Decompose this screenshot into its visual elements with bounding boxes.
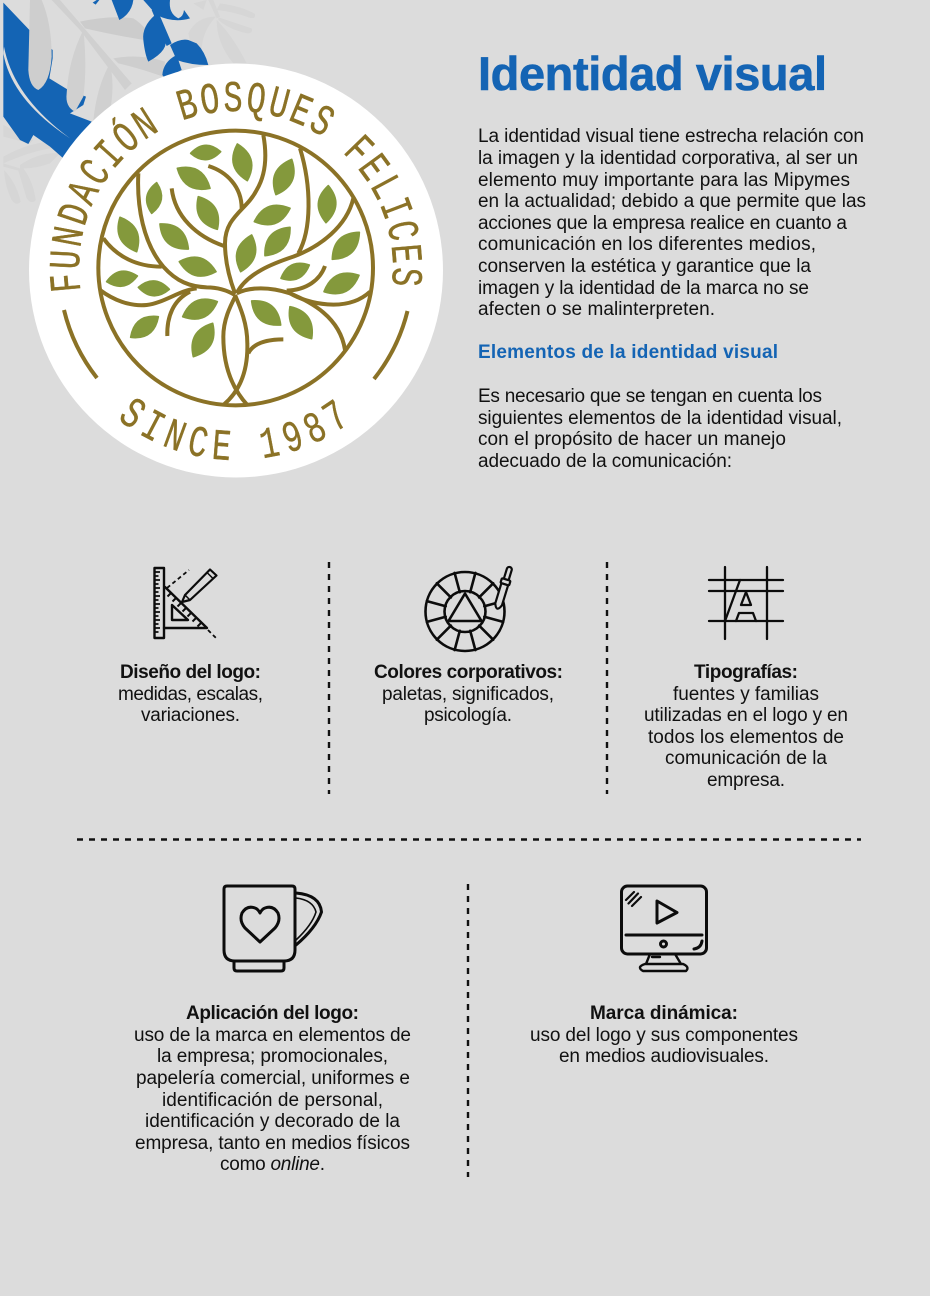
text: diseño del logo: medidas, escalas, <box>118 684 263 705</box>
icon: ruler, set square and pencil <box>154 568 217 639</box>
text: colores corporativos: paletas, significados, <box>382 684 554 705</box>
logo text: Fundación Bosques Felices: I <box>367 191 421 227</box>
second paragraph: con el propósito de hacer un manejo <box>478 429 786 450</box>
text: tipografías: utilizadas en el logo y en <box>644 705 848 726</box>
logo side arcs <box>64 310 408 379</box>
intro paragraph: La identidad visual tiene estrecha relación con <box>478 126 864 147</box>
logo tree emblem <box>98 131 373 405</box>
logo text: Fundación Bosques Felices: C <box>70 151 123 195</box>
logo text: Since 1987: C <box>183 418 212 471</box>
text: marca dinámica <box>530 1003 798 1067</box>
logo text: Since 1987: 9 <box>276 412 310 466</box>
tree leaves <box>107 144 359 357</box>
text: aplicación del logo: la empresa; promocionales, <box>157 1046 388 1067</box>
intro paragraph: comunicación en los diferentes medios, <box>478 234 816 255</box>
text: tipografías: fuentes y familias <box>673 684 819 705</box>
second paragraph <box>478 386 842 472</box>
text: aplicación del logo: Aplicación del logo: <box>186 1003 359 1024</box>
logo text: Fundación Bosques Felices: Q <box>244 75 268 127</box>
logo text: Fundación Bosques Felices: U <box>42 249 93 270</box>
text: marca dinámica: uso del logo y sus componentes <box>530 1025 798 1046</box>
icon: mug with heart <box>224 886 322 971</box>
logo text: Fundación Bosques Felices: S <box>300 96 342 149</box>
text: diseño del logo: variaciones. <box>141 705 240 726</box>
logo text: Fundación Bosques Felices: I <box>86 131 136 179</box>
logo text: Fundación Bosques Felices: D <box>49 198 103 232</box>
logo text: Fundación Bosques Felices: U <box>263 78 294 132</box>
text: aplicación del logo: uso de la marca en elementos de <box>134 1025 411 1046</box>
text: aplicación del logo: identificación de personal, <box>162 1090 383 1111</box>
logo text: Since 1987: E <box>210 422 233 474</box>
text: colores corporativos: Colores corporativos: <box>374 662 563 683</box>
decorative foliage: blue and grey leaves <box>3 0 255 204</box>
tree ring and branches <box>98 131 373 405</box>
logo text: Since 1987 <box>109 389 359 474</box>
logo text: Since 1987: 1 <box>256 419 284 472</box>
logo text: Since 1987: 8 <box>296 403 335 457</box>
text: tipografías: comunicación de la <box>665 748 827 769</box>
intro paragraph: acciones que la empresa realice en cuanto a <box>478 213 847 234</box>
intro paragraph: la imagen y la identidad corporativa, al ser un <box>478 148 858 169</box>
text: aplicación del logo: identificación y decorado de la <box>145 1111 400 1132</box>
text: tipografías: Tipografías: <box>694 662 798 683</box>
text: aplicación del logo <box>134 1003 411 1175</box>
icon: colour wheel and dropper <box>426 566 514 651</box>
logo text: Since 1987: I <box>132 401 172 455</box>
text: marca dinámica: en medios audiovisuales. <box>559 1046 769 1067</box>
logo text: Fundación Bosques Felices <box>42 74 430 294</box>
logo text: Fundación Bosques Felices: N <box>124 99 167 152</box>
text: colores corporativos <box>374 662 563 726</box>
white logo disc <box>29 64 443 478</box>
logo text: Since 1987: S <box>109 389 154 441</box>
text: aplicación del logo: papelería comercial, uniformes e <box>136 1068 410 1089</box>
text: aplicación del logo: empresa, tanto en medios físicos <box>135 1133 410 1154</box>
second paragraph: adecuado de la comunicación: <box>478 451 732 472</box>
text: diseño del logo <box>118 662 263 726</box>
text: tipografías <box>644 662 848 791</box>
intro paragraph <box>478 126 866 320</box>
icon: typography grid <box>709 567 783 639</box>
logo text: Fundación Bosques Felices: E <box>378 242 430 265</box>
logo text: Fundación Bosques Felices: C <box>374 216 427 246</box>
logo text: Fundación Bosques Felices: Ó <box>103 113 151 165</box>
logo text: Fundación Bosques Felices: E <box>282 85 319 139</box>
intro paragraph: elemento muy importante para las Mipymes <box>478 170 850 191</box>
logo: Fundación Bosques Felices <box>29 64 443 478</box>
logo text: Fundación Bosques Felices: L <box>358 168 411 208</box>
logo text: Fundación Bosques Felices: F <box>42 271 94 294</box>
intro paragraph: conserven la estética y garantice que la <box>478 256 811 277</box>
icon: monitor with play button <box>622 886 706 971</box>
logo text: Fundación Bosques Felices: F <box>332 127 382 175</box>
logo text: Fundación Bosques Felices: S <box>223 74 243 125</box>
logo text: Fundación Bosques Felices: E <box>346 146 398 191</box>
text: diseño del logo: Diseño del logo: <box>120 662 261 683</box>
intro paragraph: afecten o se malinterpreten. <box>478 299 715 320</box>
title: Identidad visual <box>478 47 827 100</box>
logo text: Fundación Bosques Felices: N <box>44 223 97 251</box>
text: colores corporativos: psicología. <box>424 705 512 726</box>
text: marca dinámica: Marca dinámica: <box>590 1003 738 1024</box>
logo text: Fundación Bosques Felices: A <box>58 174 112 213</box>
subheading: Elementos de la identidad visual <box>478 342 778 363</box>
logo text: Fundación Bosques Felices: S <box>379 266 430 288</box>
logo text: Fundación Bosques Felices: O <box>197 75 223 128</box>
text: aplicación del logo: como online. <box>220 1154 325 1175</box>
text: tipografías: todos los elementos de <box>648 727 844 748</box>
logo text: Since 1987: 7 <box>315 392 359 444</box>
logo text: Since 1987: N <box>157 411 192 465</box>
second paragraph: Es necesario que se tengan en cuenta los <box>478 386 822 407</box>
logo text: Fundación Bosques Felices: B <box>171 80 204 134</box>
text: tipografías: empresa. <box>707 770 785 791</box>
second paragraph: siguientes elementos de la identidad visual, <box>478 408 842 429</box>
intro paragraph: imagen y la identidad de la marca no se <box>478 278 809 299</box>
intro paragraph: en la actualidad; debido a que permite que las <box>478 191 866 212</box>
